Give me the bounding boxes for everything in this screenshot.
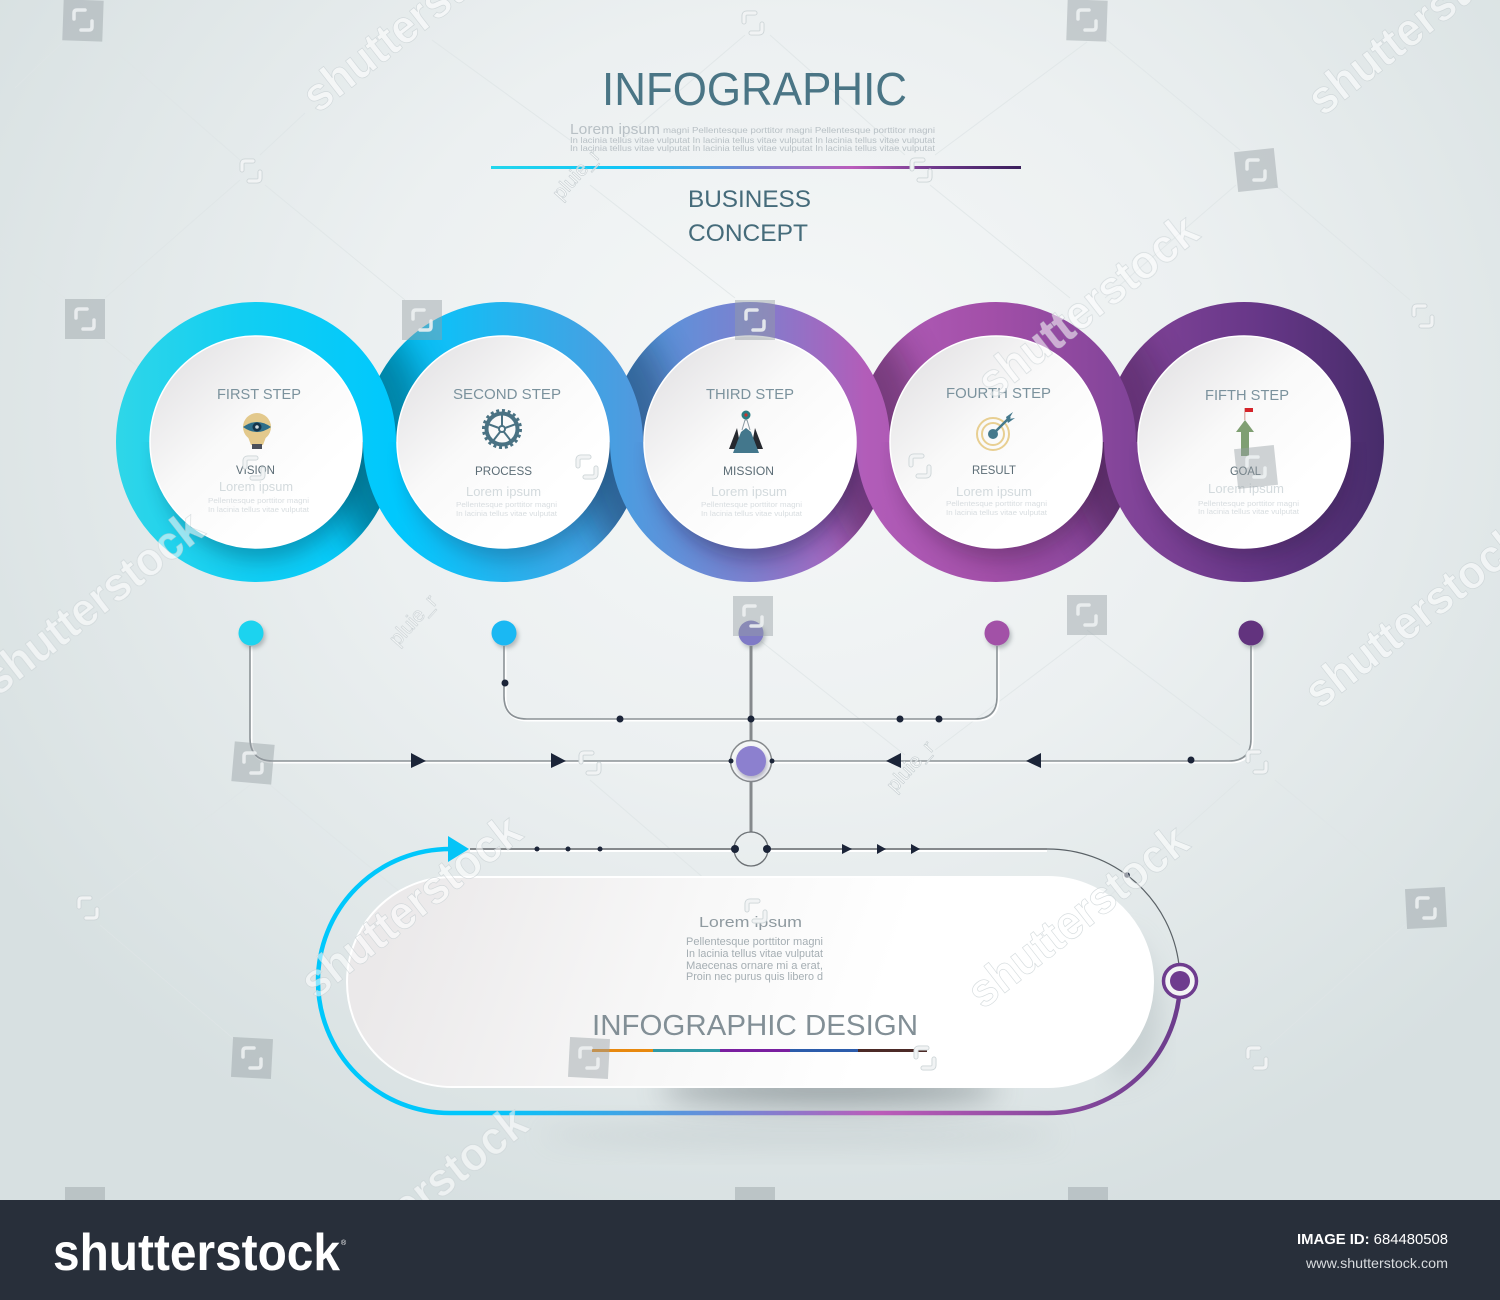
panel body text: Pellentesque porttitor magni — [686, 936, 823, 948]
step 5 card: FIFTH STEP — [1205, 387, 1289, 404]
step 2 card: SECOND STEP — [453, 386, 561, 403]
step 3 card: MISSION — [723, 464, 774, 478]
pluie_r watermark text — [385, 145, 939, 796]
node dots — [238, 620, 1266, 648]
step 2 card: PROCESS — [475, 464, 532, 478]
interlocked rings — [81, 267, 1419, 617]
panel body text: In lacinia tellus vitae vulputat — [686, 948, 823, 960]
step 3 card: Pellentesque porttitor magni — [701, 500, 802, 509]
watermark text: shutterstock — [290, 802, 532, 1008]
step 3 card — [644, 336, 856, 548]
step 1 card: Pellentesque porttitor magni — [208, 496, 309, 505]
bottom panel: Lorem ipsum — [699, 914, 802, 931]
step 5 card: Lorem ipsum — [1208, 481, 1284, 496]
icon: eye light bulb — [243, 413, 271, 449]
step 4 card — [890, 336, 1102, 548]
bottom bar — [0, 1200, 1500, 1300]
step 4 card: FOURTH STEP — [946, 385, 1051, 402]
header body text — [570, 122, 936, 153]
bottom panel: INFOGRAPHIC DESIGN — [592, 1010, 918, 1042]
subtitle: CONCEPT — [688, 220, 808, 247]
icon: gear — [484, 410, 520, 448]
step 2 card: Pellentesque porttitor magni — [456, 500, 557, 509]
icon: mountain with target — [729, 410, 763, 453]
loop node — [1164, 964, 1196, 998]
small dots — [502, 680, 1194, 764]
header body text: In lacinia tellus vitae vulputat In lacinia tellus vitae vulputat In lacinia tellus vitae vulputat — [570, 143, 936, 153]
bottom bar: ® — [341, 1239, 347, 1247]
pluie_r watermark text: pluie_r — [385, 591, 442, 650]
step 2 card: Lorem ipsum — [466, 484, 541, 499]
panel body text: Proin nec purus quis libero d — [686, 971, 823, 983]
flow arrows — [411, 753, 1041, 768]
watermark text: shutterstock — [296, 1094, 538, 1300]
header body text: In lacinia tellus vitae vulputat In lacinia tellus vitae vulputat In lacinia tellus vitae vulputat — [570, 135, 936, 145]
gradient divider — [491, 166, 1021, 169]
step 5 card — [1138, 336, 1350, 548]
watermark text: shutterstock — [967, 202, 1209, 408]
bottom bar: shutterstock — [53, 1224, 340, 1282]
header body text: Lorem ipsum — [570, 122, 660, 138]
step 5 card: GOAL — [1230, 464, 1261, 478]
central hub — [730, 740, 772, 782]
colour bar — [592, 1049, 927, 1052]
step 1 card: VISION — [236, 463, 275, 477]
bottom bar: www.shutterstock.com — [1305, 1255, 1448, 1271]
step 5 card: Pellentesque porttitor magni — [1198, 499, 1299, 508]
step 1 card: Lorem ipsum — [219, 479, 293, 494]
step 4 card: Pellentesque porttitor magni — [946, 499, 1047, 508]
bottom panel — [347, 877, 1153, 1087]
icon: dart target — [977, 412, 1015, 450]
step 1 card: FIRST STEP — [217, 386, 301, 403]
step 1 card — [150, 336, 362, 548]
step 2 card: In lacinia tellus vitae vulputat — [456, 509, 558, 518]
title: INFOGRAPHIC — [602, 63, 907, 115]
header body text: magni Pellentesque porttitor magni Pellentesque porttitor magni — [663, 125, 935, 135]
pluie_r watermark text: pluie_r — [882, 737, 939, 796]
loop dots and arrows — [534, 844, 1130, 878]
pill shadow — [540, 930, 1161, 1145]
flow loop around panel — [318, 832, 1196, 1113]
loop arrowhead — [448, 836, 469, 862]
connector diagram — [238, 620, 1266, 832]
subtitle: BUSINESS — [688, 186, 811, 213]
step 4 card: Lorem ipsum — [956, 484, 1032, 499]
step 3 card: Lorem ipsum — [711, 484, 787, 499]
step 4 card: In lacinia tellus vitae vulputat — [946, 508, 1048, 517]
bottom bar: IMAGE ID: 684480508 — [1297, 1231, 1448, 1248]
small watermark marks — [79, 13, 1432, 1068]
step 1 card: In lacinia tellus vitae vulputat — [208, 505, 310, 514]
subtitle — [688, 186, 811, 247]
panel body text: Maecenas ornare mi a erat, — [686, 960, 823, 972]
icon: arrow with flag — [1236, 408, 1254, 456]
step 2 card — [397, 336, 609, 548]
step 4 card: RESULT — [972, 463, 1017, 477]
step 3 card: THIRD STEP — [706, 386, 794, 403]
step 5 card: In lacinia tellus vitae vulputat — [1198, 507, 1300, 516]
watermark text: shutterstock — [957, 812, 1199, 1018]
pluie_r watermark text: pluie_r — [548, 145, 605, 204]
step 3 card: In lacinia tellus vitae vulputat — [701, 509, 803, 518]
panel body text — [686, 936, 823, 983]
